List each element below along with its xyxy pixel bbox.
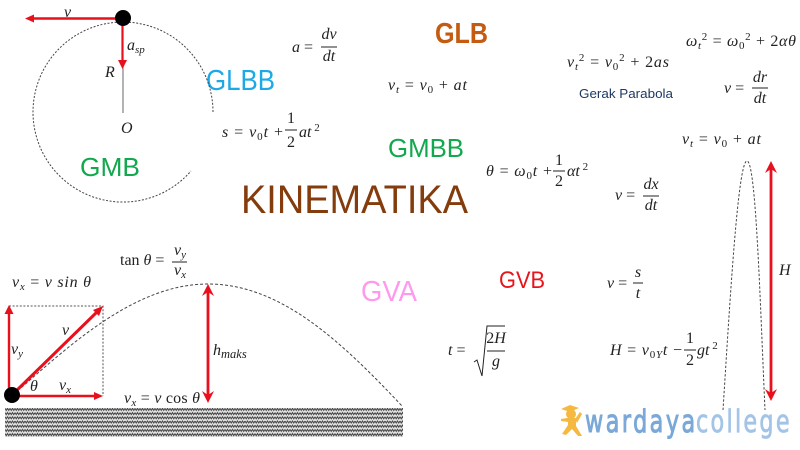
formula: v_t GVB: =: [694, 131, 713, 148]
formula: H: 1: [686, 330, 694, 347]
label: a_sp: sp: [135, 44, 145, 56]
heading: Gerak Parabola: Gerak Parabola: [579, 86, 674, 101]
heading: GLBB: GLBB: [206, 65, 275, 97]
formula: theta: αt: [567, 163, 580, 180]
label: O: O: [121, 120, 133, 137]
formula: v_x sin: =: [26, 274, 44, 291]
formula: v_t GLBB: t: [396, 84, 400, 96]
formula: a = dv/dt: dt: [323, 48, 336, 65]
wordmark: college: college: [696, 404, 790, 440]
formula: s: 2: [311, 122, 320, 134]
formula: theta: +: [543, 163, 552, 180]
formula: v_t squared: v: [605, 54, 612, 71]
dotted trajectory: [14, 284, 403, 407]
arrow: h maks: [202, 284, 214, 403]
diagram: circular motion: [25, 4, 213, 202]
formula: tan theta: x: [180, 269, 186, 281]
formula: v_t squared: as: [654, 54, 669, 71]
formula: omega squared: 0: [739, 40, 745, 52]
formula: v_t GVB: +: [728, 131, 747, 148]
icon: graduate child: [561, 405, 582, 436]
formula: v_t GVB: t: [690, 138, 694, 150]
formula: v_t GLBB: v: [388, 77, 395, 94]
formula: v_t GLBB: v: [420, 77, 427, 94]
formula: H: 0: [650, 349, 656, 361]
formula: omega squared: t: [698, 40, 702, 52]
heading: GVB: GVB: [499, 267, 545, 294]
formula: s: t: [264, 124, 269, 141]
arrow: H: [765, 161, 777, 401]
formula: v = dx/dt: dt: [645, 197, 658, 214]
formula: s: +: [274, 124, 283, 141]
formula: v_t GLBB: at: [454, 77, 467, 94]
dotted trajectory: [723, 161, 765, 410]
label: v_x: v: [59, 377, 66, 394]
formula: v = s/t: v =: [607, 275, 627, 292]
formula: v_t squared: + 2: [625, 54, 653, 71]
formula: H: t: [663, 342, 668, 359]
formula: v_t squared: v: [567, 54, 574, 71]
label: v: v: [64, 4, 72, 21]
formula: v_t GLBB: =: [400, 77, 419, 94]
arrow: centripetal acceleration: [118, 20, 127, 69]
ground: [5, 408, 403, 437]
formula: a = dv/dt: [292, 26, 337, 65]
formula: t = sqrt(2H/g): [448, 326, 507, 376]
arrow: v: [14, 306, 103, 393]
formula: v_x sin: v sin θ: [45, 274, 91, 291]
formula: v_x cos: x: [130, 397, 136, 409]
formula: v_t GVB: 0: [722, 138, 728, 150]
formula: H: H = v: [610, 342, 649, 359]
dotted frame: [9, 306, 103, 396]
formula: H: 2: [686, 352, 694, 369]
formula: omega squared: ω: [686, 33, 697, 50]
heading: GMBB: GMBB: [388, 133, 464, 163]
formula: t = sqrt(2H/g): 2H: [486, 330, 507, 347]
formula: s: 2: [287, 134, 295, 151]
formula: v_t squared: 2: [619, 52, 625, 64]
heading: GLB: GLB: [435, 18, 488, 50]
formula: s: [222, 110, 320, 151]
label: theta: θ: [30, 378, 38, 395]
formula: theta: [486, 152, 588, 190]
diagram: projectile motion: [4, 284, 403, 437]
formula: v_t squared: 0: [613, 61, 619, 73]
formula: omega squared: =: [708, 33, 726, 50]
formula: H: Y: [656, 349, 664, 361]
formula: v = dr/dt: dr: [753, 69, 768, 86]
formula: v = s/t: [607, 264, 643, 302]
ball: [115, 10, 131, 26]
formula: v_t GVB: v: [682, 131, 689, 148]
label: R: R: [104, 64, 115, 81]
formula: v_t GVB: v: [714, 131, 721, 148]
formula: v = dx/dt: [615, 176, 659, 214]
formula: v_t squared: t: [575, 61, 579, 73]
heading: GMB: GMB: [80, 152, 140, 182]
formula: v_t squared: 2: [579, 52, 584, 64]
formula: a = dv/dt: a =: [292, 39, 313, 56]
formula: s: 1: [287, 110, 295, 127]
formula: v_t GLBB: 0: [428, 84, 434, 96]
formula: H: 2: [709, 340, 718, 352]
label: h maks: maks: [221, 347, 247, 361]
formula: v_x cos: =: [136, 390, 154, 407]
heading: GVA: GVA: [361, 276, 418, 308]
formula: tan theta: v: [174, 242, 181, 259]
formula: v = dx/dt: v =: [615, 187, 635, 204]
formula: v_t GLBB: +: [434, 77, 453, 94]
formula: v_t squared: =: [585, 54, 604, 71]
formula: omega squared: αθ: [779, 33, 796, 50]
label: h maks: h: [213, 342, 221, 359]
ball: [4, 387, 20, 403]
dotted circular path: [33, 22, 213, 202]
diagram: vertical motion: [723, 161, 792, 410]
formula: theta: 2: [555, 173, 563, 190]
formula: theta: 1: [555, 152, 563, 169]
formula: v_x sin: v: [12, 274, 19, 291]
formula: v = dr/dt: v =: [724, 80, 744, 97]
title: KINEMATIKA: [241, 178, 468, 222]
formula: H: gt: [697, 342, 709, 359]
formula: v = dx/dt: dx: [643, 176, 659, 193]
formula: tan theta: tan θ =: [120, 252, 164, 269]
arrow: velocity: [25, 14, 120, 22]
formula: tan theta: y: [180, 249, 186, 261]
formula: omega squared: + 2: [751, 33, 778, 50]
label: a_sp: a: [127, 37, 135, 54]
formula: omega squared: ω: [727, 33, 738, 50]
label: v_x: x: [65, 384, 71, 396]
formula: v_t GVB: at: [748, 131, 761, 148]
formula: theta: θ = ω: [486, 163, 526, 180]
formula: v_x sin: x: [19, 281, 25, 293]
radius line: [122, 66, 124, 113]
label: H: H: [778, 262, 792, 279]
formula: t = sqrt(2H/g): t =: [448, 342, 465, 359]
formula: v = dr/dt: [724, 69, 768, 107]
formula: theta: 0: [526, 170, 532, 182]
formula: a = dv/dt: dv: [321, 26, 337, 43]
formula: v = dr/dt: dt: [754, 90, 767, 107]
arrow: v_x: [14, 392, 103, 400]
formula: v_x cos: v: [124, 390, 131, 407]
formula: omega squared: 2: [745, 31, 751, 43]
formula: H: [609, 330, 718, 369]
arrow: v_y: [4, 305, 14, 392]
formula: s: s = v: [222, 124, 256, 141]
logo: Wardaya College: [561, 404, 790, 440]
formula: s: at: [299, 124, 311, 141]
label: v_y: y: [17, 348, 23, 360]
wordmark: wardaya: wardaya: [585, 404, 695, 440]
formula: theta: 2: [580, 161, 588, 173]
formula: t = sqrt(2H/g): g: [492, 353, 500, 370]
label: v: v: [62, 322, 70, 339]
formula: v_x cos: v cos θ: [154, 390, 200, 407]
formula: tan theta: [120, 242, 187, 281]
formula: H: −: [673, 342, 682, 359]
formula: v = s/t: s: [635, 264, 641, 281]
formula: v = s/t: t: [636, 285, 641, 302]
formula: theta: t: [533, 163, 538, 180]
formula: omega squared: 2: [702, 31, 707, 43]
formula: tan theta: v: [174, 262, 181, 279]
label: v_y: v: [11, 341, 18, 358]
formula: s: 0: [257, 131, 263, 143]
